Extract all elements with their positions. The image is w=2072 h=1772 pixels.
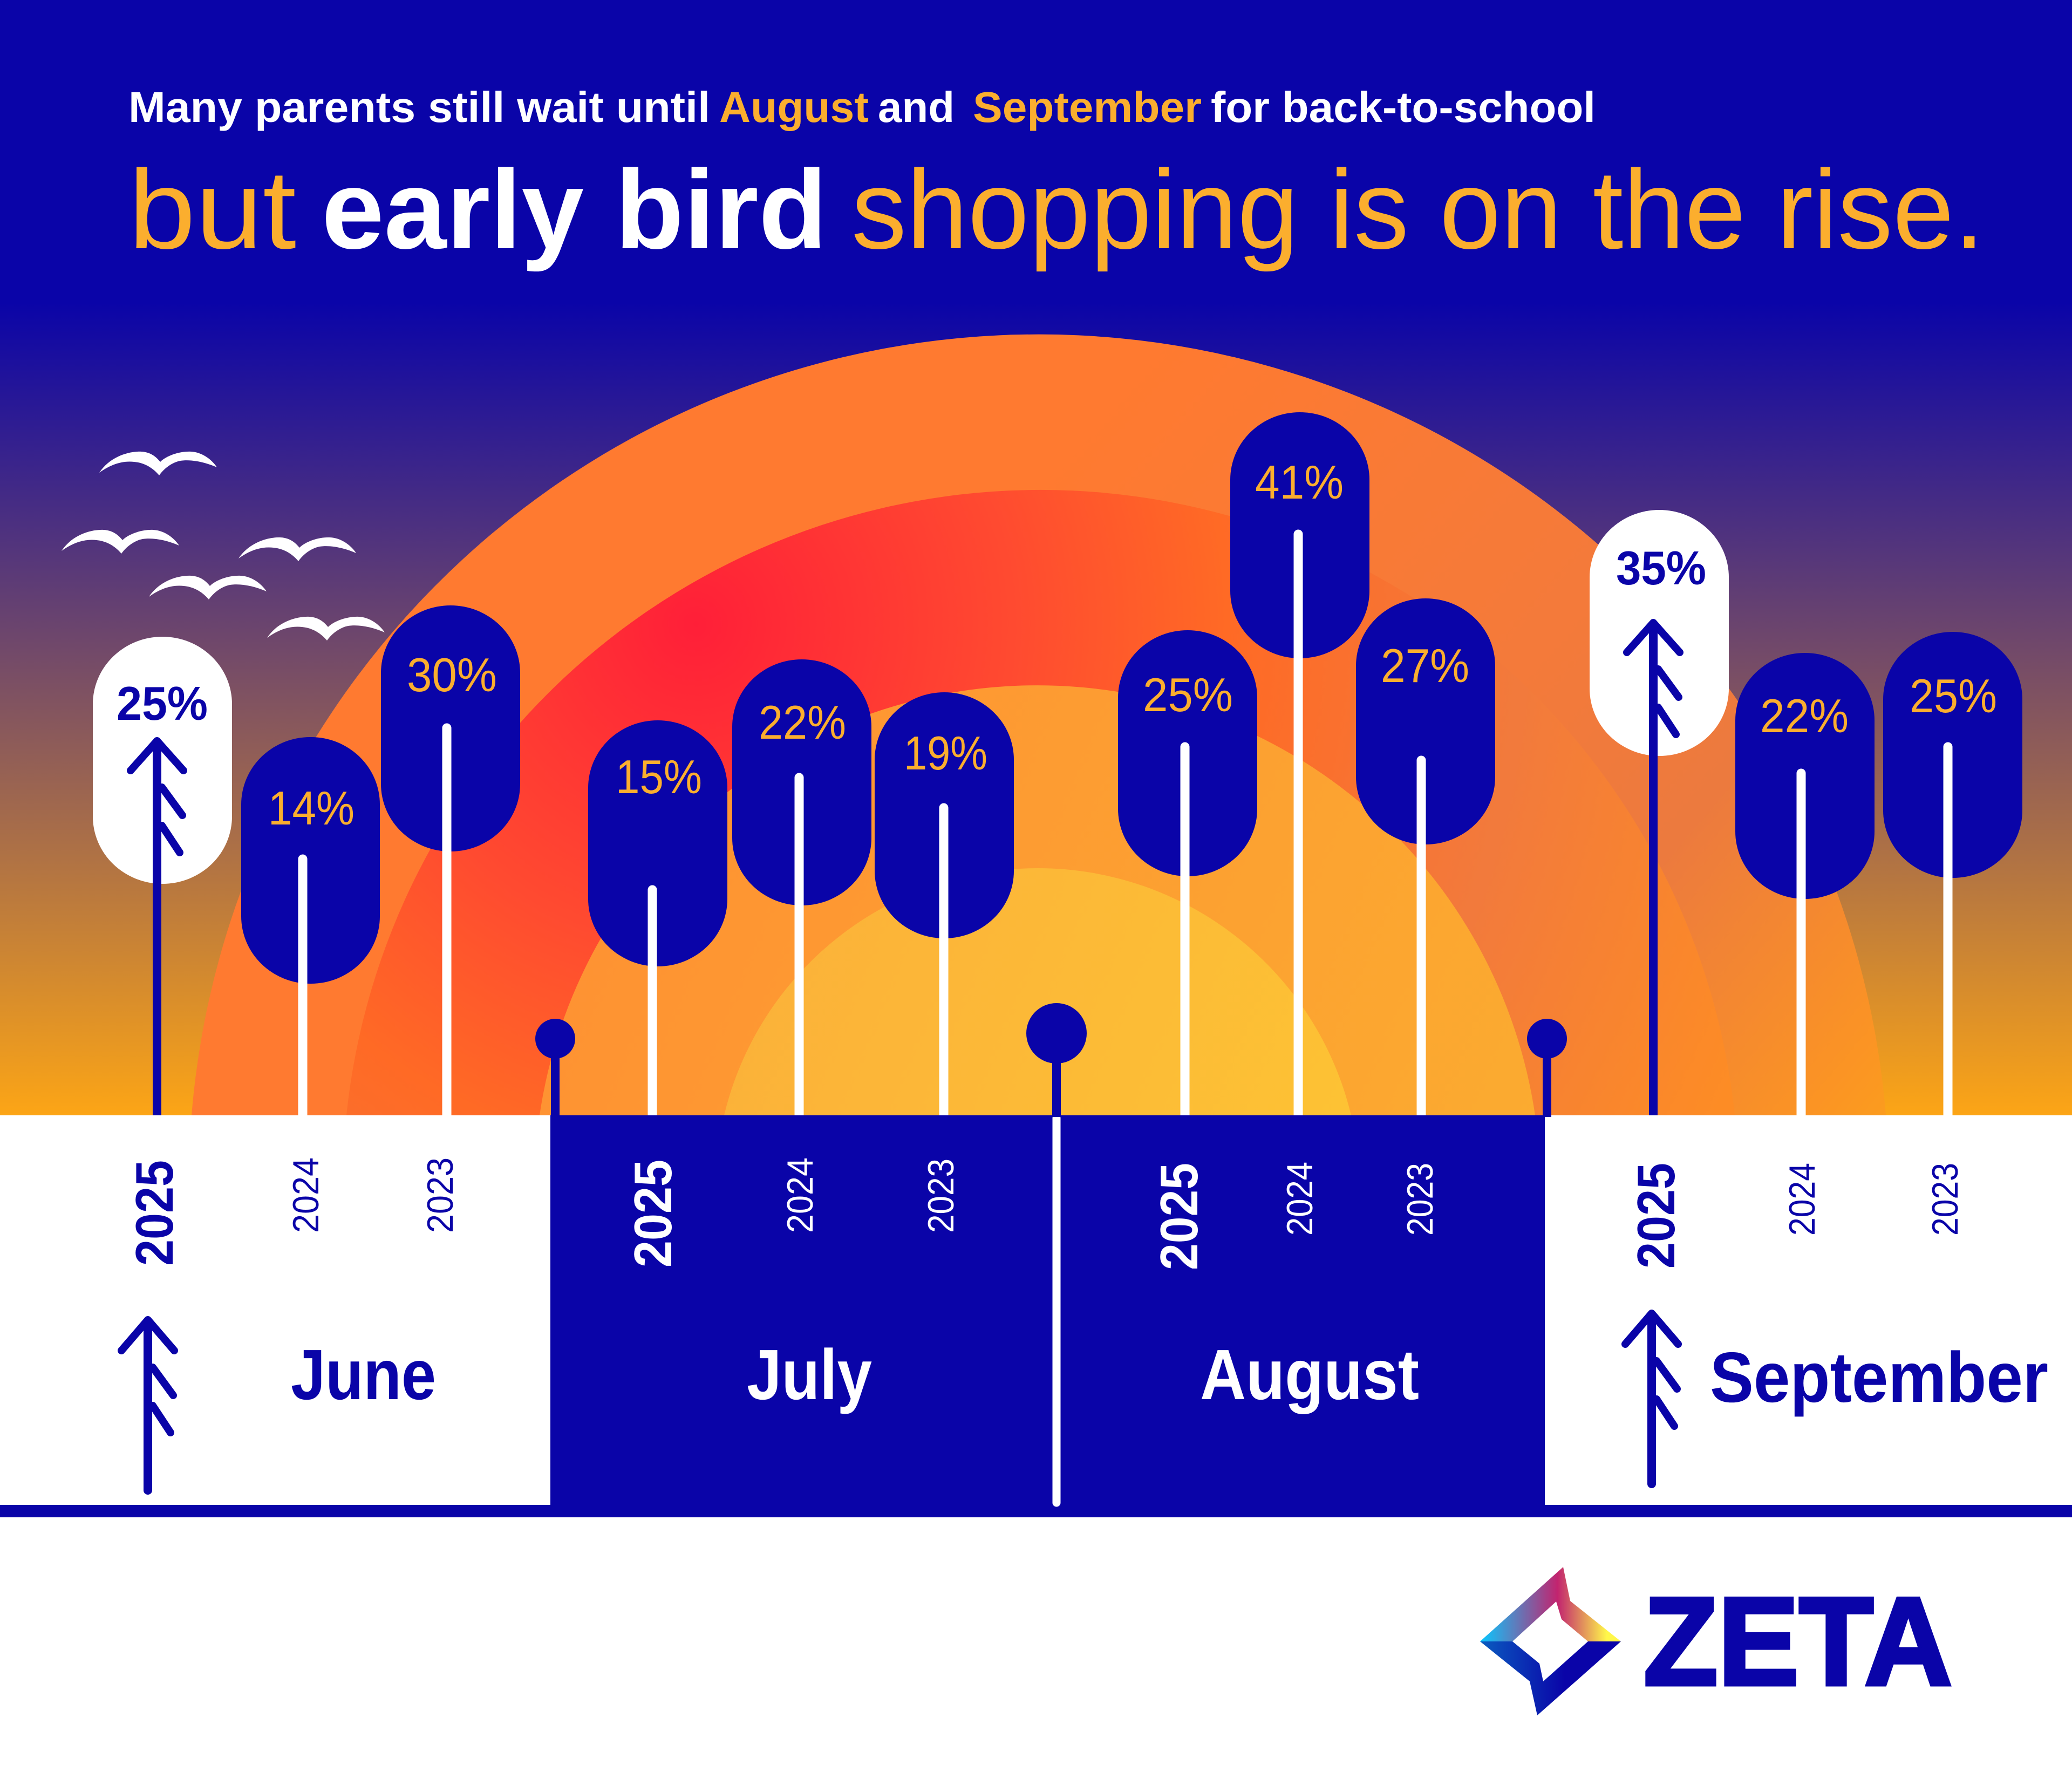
- birds: [62, 452, 385, 640]
- title: early bird: [322, 147, 827, 272]
- August 41 percent: 41%: [1255, 455, 1344, 509]
- year labels: July: [623, 1157, 962, 1267]
- icon: June up arrow: [121, 1320, 174, 1490]
- heading line: for back-to-school: [1211, 83, 1596, 131]
- June 2025 arrow stem: [131, 741, 183, 1115]
- September 2023 stem: [1944, 747, 1952, 1115]
- month label: September: September: [1710, 1338, 2048, 1417]
- sunrise arcs: [192, 335, 1886, 1115]
- June 30 percent: 30%: [407, 648, 497, 701]
- September 2024 stem: [1797, 773, 1805, 1115]
- year labels: June: [125, 1157, 461, 1266]
- title: shopping is on the rise.: [851, 147, 1985, 272]
- month label: July: July: [747, 1335, 872, 1414]
- September 2025 arrow stem: [1627, 623, 1680, 1115]
- August 2024 stem: [1294, 534, 1303, 1115]
- July 2023 stem: [939, 808, 949, 1115]
- August 2023 pill: [1356, 598, 1495, 844]
- August 27 percent: 27%: [1381, 639, 1469, 692]
- September bars: [1590, 510, 2022, 1115]
- July 2023 pill: [875, 692, 1014, 938]
- sky background: [0, 0, 2072, 1115]
- August 2023 stem: [1417, 760, 1426, 1115]
- month band: white background: [0, 1115, 2072, 1505]
- month band: bottom rule: [0, 1505, 2072, 1517]
- pin: July-August boundary: [1026, 1003, 1087, 1117]
- year labels: September: 2025: [1626, 1163, 1686, 1269]
- heading line: September: [973, 83, 1202, 131]
- August 2024 pill: [1230, 412, 1369, 658]
- July 2025 pill: [588, 720, 727, 966]
- year labels: June: 2025: [125, 1160, 184, 1266]
- August 25 percent: 25%: [1143, 668, 1233, 721]
- July 2024 stem: [794, 778, 804, 1115]
- July 22 percent: 22%: [759, 696, 846, 749]
- September 25 percent: 25%: [1910, 669, 1997, 723]
- icon: September up arrow: [1625, 1313, 1678, 1484]
- logo wordmark: ZETA: [1644, 1572, 1952, 1712]
- September 2023 pill: [1883, 632, 2022, 878]
- June 2025 pill: [93, 637, 232, 884]
- year labels: June: 2024: [285, 1157, 326, 1233]
- title: but: [128, 147, 296, 272]
- July 2024 pill: [732, 659, 871, 905]
- June 2024 pill: [241, 737, 380, 984]
- June 14 percent: 14%: [268, 781, 355, 835]
- June 25 percent: 25%: [117, 677, 208, 730]
- year labels: July: 2024: [780, 1157, 821, 1233]
- September 22 percent: 22%: [1760, 689, 1849, 742]
- pin: June-July boundary: [535, 1019, 575, 1117]
- divider: July and August: [1052, 1118, 1061, 1503]
- year labels: September: [1626, 1163, 1966, 1269]
- August 2025 pill: [1118, 630, 1257, 876]
- September 2024 pill: [1735, 653, 1875, 899]
- month label: August: August: [1200, 1335, 1419, 1414]
- year labels: September: 2023: [1925, 1163, 1966, 1236]
- month band: blue July-August panel: [550, 1115, 1545, 1505]
- July bars: [588, 659, 1014, 1115]
- July 19 percent: 19%: [904, 726, 987, 780]
- June 2024 stem: [298, 859, 308, 1115]
- August bars: [1118, 412, 1495, 1115]
- year labels: September: 2024: [1782, 1163, 1823, 1236]
- June bars: [93, 605, 520, 1115]
- September 2025 pill: [1590, 510, 1729, 756]
- July 2025 stem: [648, 890, 657, 1115]
- year labels: July: 2023: [921, 1158, 962, 1233]
- heading line: [128, 83, 1596, 131]
- heading line: August: [719, 83, 869, 131]
- heading line: Many parents still wait until: [128, 83, 710, 131]
- year labels: August: [1149, 1162, 1441, 1270]
- year labels: August: 2023: [1400, 1163, 1441, 1236]
- logo mark: [1480, 1567, 1621, 1715]
- September 35 percent: 35%: [1616, 541, 1706, 595]
- logo: Zeta: [1480, 1567, 1952, 1715]
- June 2023 pill: [381, 605, 520, 851]
- pin: August-September boundary: [1527, 1019, 1567, 1117]
- title: [128, 147, 1985, 272]
- heading line: and: [878, 83, 955, 131]
- month label: June: June: [291, 1335, 436, 1414]
- August 2025 stem: [1181, 747, 1189, 1115]
- year labels: August: 2025: [1149, 1163, 1209, 1270]
- June 2023 stem: [442, 728, 451, 1115]
- year labels: June: 2023: [420, 1157, 461, 1233]
- July 15 percent: 15%: [616, 750, 702, 803]
- year labels: August: 2024: [1279, 1162, 1320, 1236]
- year labels: July: 2025: [623, 1160, 683, 1267]
